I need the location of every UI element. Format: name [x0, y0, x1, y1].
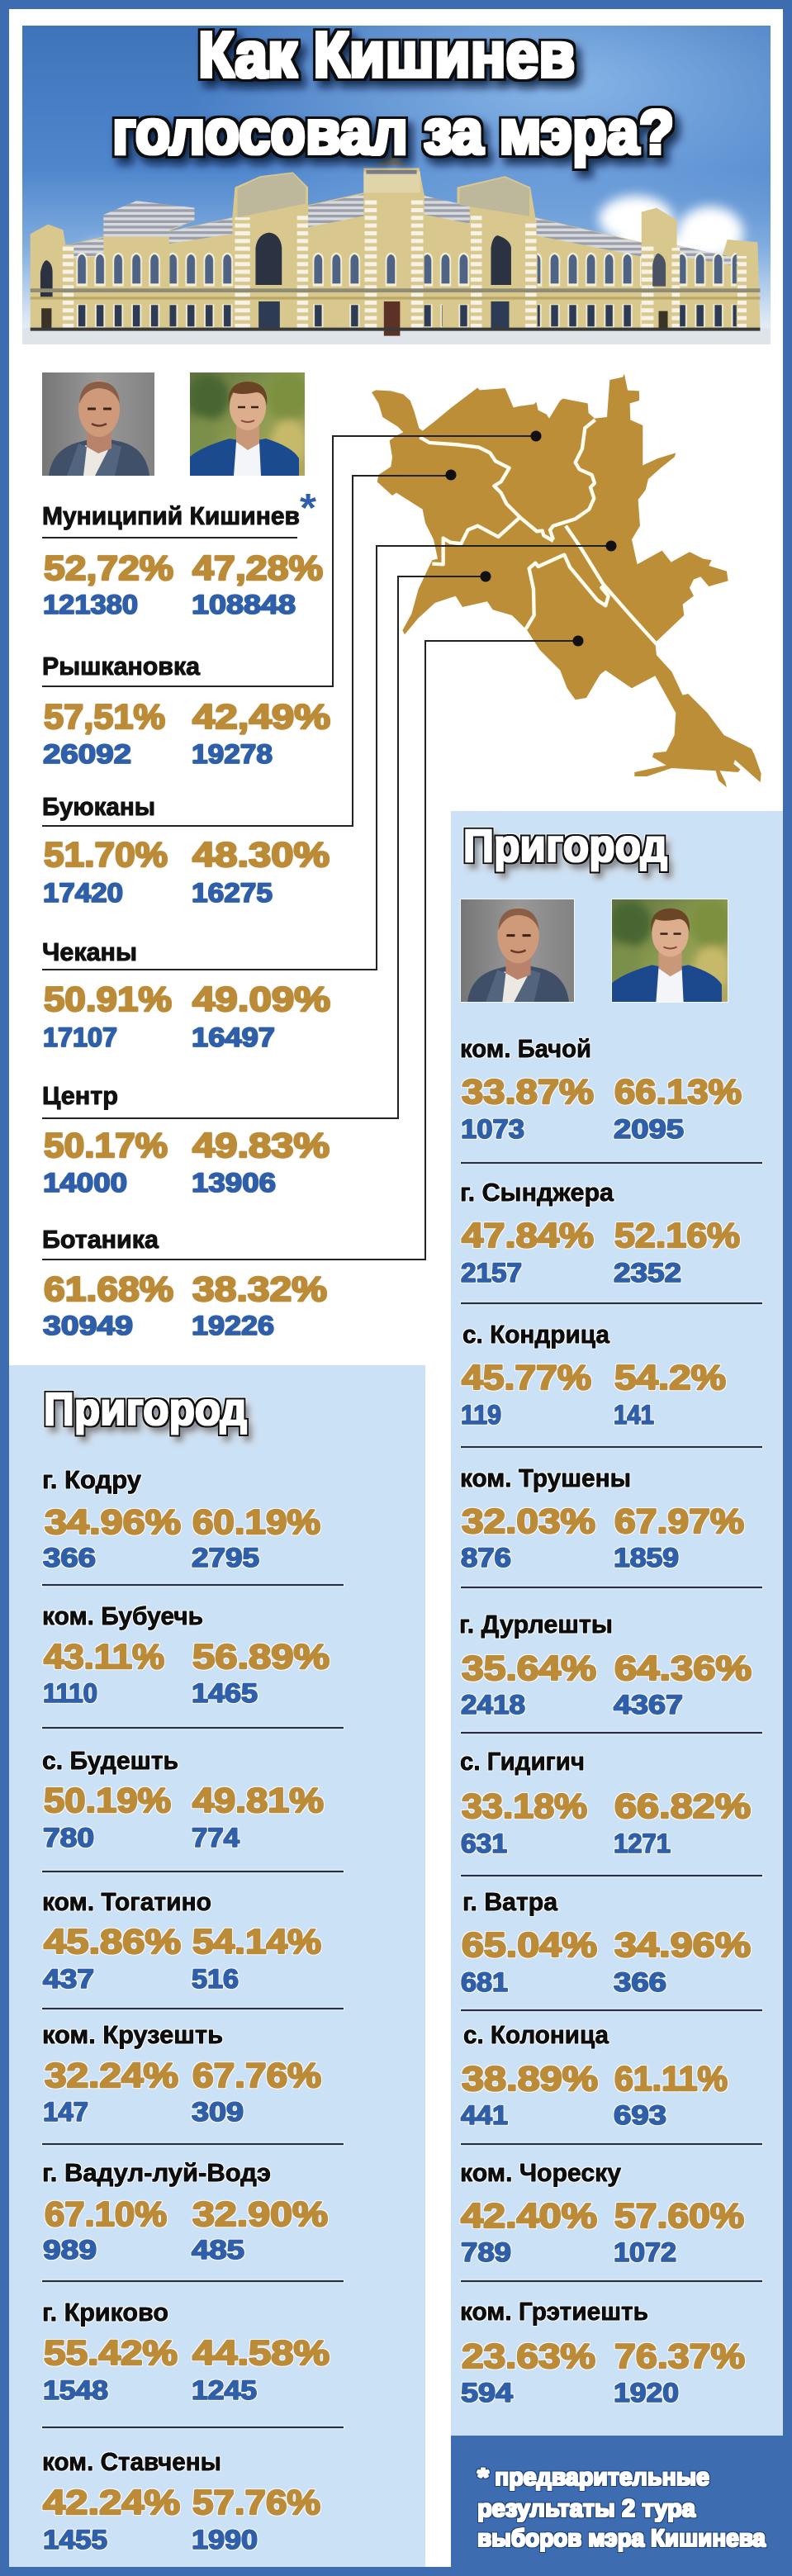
ком. Ставчены: ком. Ставчены — [42, 2447, 221, 2476]
connector: Ботаника — [42, 641, 578, 1260]
ком. Тогатино: 437 — [43, 1964, 94, 1994]
heading: Буюканы — [42, 792, 155, 821]
ком. Грэтиешть: 594 — [461, 2378, 513, 2408]
asterisk: * — [477, 2464, 489, 2491]
votes — [43, 590, 296, 619]
photo: candidate 1 — [461, 899, 574, 1002]
share: 38.32% — [192, 1269, 327, 1308]
г. Ватра: 65.04% — [462, 1925, 597, 1964]
photo: candidate 1 — [42, 372, 154, 476]
share: 48.30% — [192, 835, 330, 874]
section: Муниципий Кишинев — [42, 486, 323, 619]
ком. Ставчены: 1455 — [43, 2525, 107, 2555]
votes — [43, 739, 273, 769]
votes — [43, 1311, 274, 1340]
section: Рышкановка — [42, 652, 330, 769]
ком. Грэтиешть: 23.63% — [462, 2336, 595, 2375]
с. Гидигич: 631 — [461, 1829, 507, 1858]
ком. Тогатино: 45.86% — [44, 1922, 181, 1961]
г. Криково: 1548 — [43, 2375, 108, 2405]
section: Чеканы — [42, 937, 330, 1052]
section: Буюканы — [42, 792, 330, 908]
г. Сынджера: 2352 — [614, 1258, 681, 1288]
ком. Крузешть — [42, 2020, 344, 2144]
ком. Бубуечь: 1110 — [43, 1678, 97, 1708]
ком. Трушены: 876 — [461, 1543, 511, 1573]
с. Колоница — [461, 2020, 762, 2144]
votes: 16497 — [192, 1022, 275, 1052]
share: 49.09% — [192, 980, 330, 1018]
panel: right suburbs background — [451, 811, 783, 2436]
ком. Грэтиешть — [460, 2297, 745, 2408]
г. Криково: 1245 — [192, 2375, 257, 2405]
ком. Чореску: ком. Чореску — [460, 2158, 622, 2187]
ком. Тогатино — [42, 1887, 344, 2009]
votes: 17420 — [43, 878, 123, 908]
votes: 26092 — [43, 739, 131, 769]
votes: 17107 — [43, 1022, 117, 1052]
с. Будешть: с. Будешть — [42, 1746, 178, 1775]
г. Вадул-луй-Водэ: 485 — [192, 2235, 244, 2265]
г. Дурлешты: г. Дурлешты — [459, 1610, 613, 1639]
г. Сынджера: г. Сынджера — [460, 1178, 614, 1207]
с. Колоница: 38.89% — [462, 2059, 598, 2098]
ком. Трушены: 67.97% — [614, 1501, 744, 1540]
share — [44, 835, 330, 874]
г. Вадул-луй-Водэ: 989 — [43, 2235, 97, 2265]
с. Гидигич: 1271 — [614, 1829, 671, 1858]
votes: 121380 — [43, 590, 138, 619]
ком. Крузешть: 67.76% — [192, 2056, 321, 2094]
ком. Грэтиешть: ком. Грэтиешть — [460, 2297, 648, 2326]
connector: Буюканы — [42, 476, 451, 826]
votes: 14000 — [43, 1168, 127, 1198]
panel: footnote background — [451, 2436, 792, 2576]
ком. Тогатино: ком. Тогатино — [42, 1887, 211, 1916]
г. Кодру — [42, 1465, 344, 1585]
с. Кондрица: 119 — [461, 1400, 501, 1430]
ком. Бубуечь: 43.11% — [44, 1637, 164, 1676]
г. Вадул-луй-Водэ: г. Вадул-луй-Водэ — [42, 2158, 271, 2187]
с. Гидигич: 33.18% — [462, 1786, 587, 1825]
votes — [43, 1022, 275, 1052]
ком. Чореску: 789 — [461, 2237, 511, 2267]
ком. Ставчены: 1990 — [192, 2525, 258, 2555]
map of Chisinau districts — [372, 374, 761, 787]
heading: Рышкановка — [42, 652, 201, 681]
ком. Бачой: ком. Бачой — [460, 1034, 591, 1063]
г. Ватра: 366 — [614, 1967, 666, 1997]
share: 52,72% — [44, 548, 173, 587]
ком. Бачой: 33.87% — [462, 1072, 594, 1111]
г. Сынджера: 2157 — [461, 1258, 522, 1288]
с. Будешть — [42, 1746, 344, 1872]
ком. Чореску: 1072 — [614, 2237, 676, 2267]
ком. Бачой: 1073 — [461, 1114, 524, 1144]
г. Кодру: 60.19% — [192, 1502, 320, 1541]
share: 50.17% — [44, 1126, 168, 1165]
connector: Центр — [42, 576, 486, 1118]
г. Кодру: 366 — [43, 1543, 96, 1573]
ком. Крузешть: ком. Крузешть — [42, 2020, 223, 2049]
footnote — [477, 2464, 766, 2552]
г. Сынджера — [460, 1178, 762, 1303]
votes: 16275 — [192, 878, 273, 908]
ком. Бачой — [460, 1034, 762, 1163]
share: 57,51% — [44, 697, 165, 736]
votes: 19278 — [192, 739, 273, 769]
ком. Ставчены — [42, 2447, 320, 2555]
ком. Крузешть: 309 — [192, 2097, 244, 2127]
footnote line 1: предварительные — [495, 2464, 709, 2491]
г. Криково — [42, 2298, 344, 2427]
г. Сынджера: 47.84% — [462, 1216, 594, 1255]
heading: Муниципий Кишинев — [42, 501, 300, 530]
hero banner: city hall with title — [22, 18, 771, 344]
г. Ватра: 34.96% — [614, 1925, 751, 1964]
с. Колоница: 693 — [614, 2100, 666, 2130]
ком. Грэтиешть: 76.37% — [614, 2336, 745, 2375]
ком. Ставчены: 42.24% — [43, 2483, 180, 2521]
ком. Трушены — [460, 1464, 762, 1587]
ком. Бубуечь — [42, 1601, 344, 1728]
ком. Крузешть: 147 — [43, 2097, 88, 2127]
с. Гидигич — [460, 1747, 762, 1876]
г. Криково: 55.42% — [44, 2333, 178, 2372]
section: Центр — [42, 1081, 330, 1198]
г. Дурлешты: 2418 — [461, 1690, 525, 1720]
с. Будешть: 780 — [43, 1823, 94, 1853]
с. Кондрица: с. Кондрица — [462, 1320, 610, 1349]
heading: Чеканы — [42, 937, 137, 966]
share: 61.68% — [44, 1269, 173, 1308]
ком. Бубуечь: 56.89% — [192, 1637, 330, 1676]
heading: Пригород: Пригород — [463, 819, 667, 871]
clouds — [83, 196, 743, 259]
ком. Чореску: 42.40% — [461, 2196, 597, 2235]
г. Дурлешты: 35.64% — [462, 1649, 596, 1687]
share: 47,28% — [192, 548, 323, 587]
с. Будешть: 774 — [192, 1823, 239, 1853]
sky glow — [22, 26, 771, 344]
connector: Чеканы — [42, 546, 611, 970]
г. Дурлешты — [459, 1610, 762, 1733]
photo: candidate 2 — [185, 372, 311, 476]
share: 42,49% — [192, 697, 330, 736]
ком. Бубуечь: ком. Бубуечь — [42, 1601, 203, 1630]
building: city hall — [31, 154, 760, 336]
share — [44, 980, 330, 1018]
ком. Чореску — [460, 2158, 762, 2281]
votes: 19226 — [192, 1311, 274, 1340]
ком. Трушены: ком. Трушены — [460, 1464, 631, 1492]
share — [44, 697, 330, 736]
ком. Бачой: 2095 — [614, 1114, 684, 1144]
с. Кондрица: 141 — [614, 1400, 654, 1430]
ком. Трушены: 1859 — [614, 1543, 679, 1573]
title — [112, 18, 674, 168]
votes — [43, 878, 273, 908]
с. Будешть: 50.19% — [44, 1781, 171, 1819]
asterisk: * — [300, 486, 316, 530]
heading: Центр — [42, 1081, 118, 1110]
г. Ватра — [461, 1887, 762, 2010]
photo: candidate 2 — [607, 899, 733, 1002]
votes: 108848 — [192, 590, 296, 619]
с. Будешть: 49.81% — [192, 1781, 324, 1819]
ком. Тогатино: 54.14% — [192, 1922, 321, 1961]
ком. Тогатино: 516 — [192, 1964, 239, 1994]
г. Кодру: г. Кодру — [42, 1465, 142, 1494]
с. Гидигич: с. Гидигич — [460, 1747, 585, 1776]
с. Колоница: с. Колоница — [463, 2020, 609, 2049]
ком. Бачой: 66.13% — [614, 1072, 742, 1111]
map markers — [446, 431, 616, 646]
share — [44, 548, 323, 587]
connector: Рышкановка — [42, 436, 536, 686]
ground — [22, 328, 771, 344]
votes: 30949 — [43, 1311, 133, 1340]
footnote line 3: выборов мэра Кишинева — [477, 2525, 766, 2552]
ком. Грэтиешть: 1920 — [614, 2378, 679, 2408]
map silhouette — [372, 374, 761, 787]
share: 49.83% — [192, 1126, 330, 1165]
title line 1: Как Кишинев — [198, 18, 575, 91]
с. Кондрица — [461, 1320, 762, 1447]
г. Вадул-луй-Водэ — [42, 2158, 344, 2281]
share: 51.70% — [44, 835, 168, 874]
с. Кондрица: 54.2% — [614, 1358, 726, 1397]
ком. Крузешть: 32.24% — [45, 2056, 178, 2094]
г. Ватра: г. Ватра — [462, 1887, 558, 1916]
г. Кодру: 2795 — [192, 1543, 259, 1573]
district borders — [420, 420, 657, 644]
с. Кондрица: 45.77% — [462, 1358, 591, 1397]
share — [44, 1126, 330, 1165]
г. Кодру: 34.96% — [45, 1502, 181, 1541]
footnote line 2: результаты 2 тура — [477, 2495, 695, 2522]
heading: Ботаника — [42, 1225, 159, 1254]
с. Колоница: 441 — [461, 2100, 508, 2130]
title line 2: голосовал за мэра? — [112, 97, 674, 168]
г. Ватра: 681 — [461, 1967, 508, 1997]
г. Сынджера: 52.16% — [614, 1216, 740, 1255]
share: 50.91% — [44, 980, 172, 1018]
heading: Пригород: Пригород — [44, 1383, 247, 1435]
panel: suburbs right — [459, 819, 762, 2408]
г. Дурлешты: 64.36% — [614, 1649, 752, 1687]
г. Криково: 44.58% — [192, 2333, 330, 2372]
panel: left suburbs background — [9, 1365, 425, 2567]
sky background — [22, 26, 771, 344]
votes — [43, 1168, 276, 1198]
votes: 13906 — [192, 1168, 276, 1198]
с. Колоница: 61.11% — [614, 2059, 728, 2098]
г. Криково: г. Криково — [42, 2298, 168, 2327]
с. Гидигич: 66.82% — [614, 1786, 751, 1825]
г. Вадул-луй-Водэ: 32.90% — [192, 2194, 328, 2233]
section: Ботаника — [42, 1225, 327, 1340]
panel: suburbs left — [42, 1383, 344, 2555]
share — [44, 1269, 327, 1308]
ком. Чореску: 57.60% — [614, 2196, 744, 2235]
г. Вадул-луй-Водэ: 67.10% — [45, 2194, 167, 2233]
ком. Бубуечь: 1465 — [192, 1678, 258, 1708]
ком. Трушены: 32.03% — [462, 1501, 595, 1540]
г. Дурлешты: 4367 — [614, 1690, 683, 1720]
ком. Ставчены: 57.76% — [192, 2483, 320, 2521]
